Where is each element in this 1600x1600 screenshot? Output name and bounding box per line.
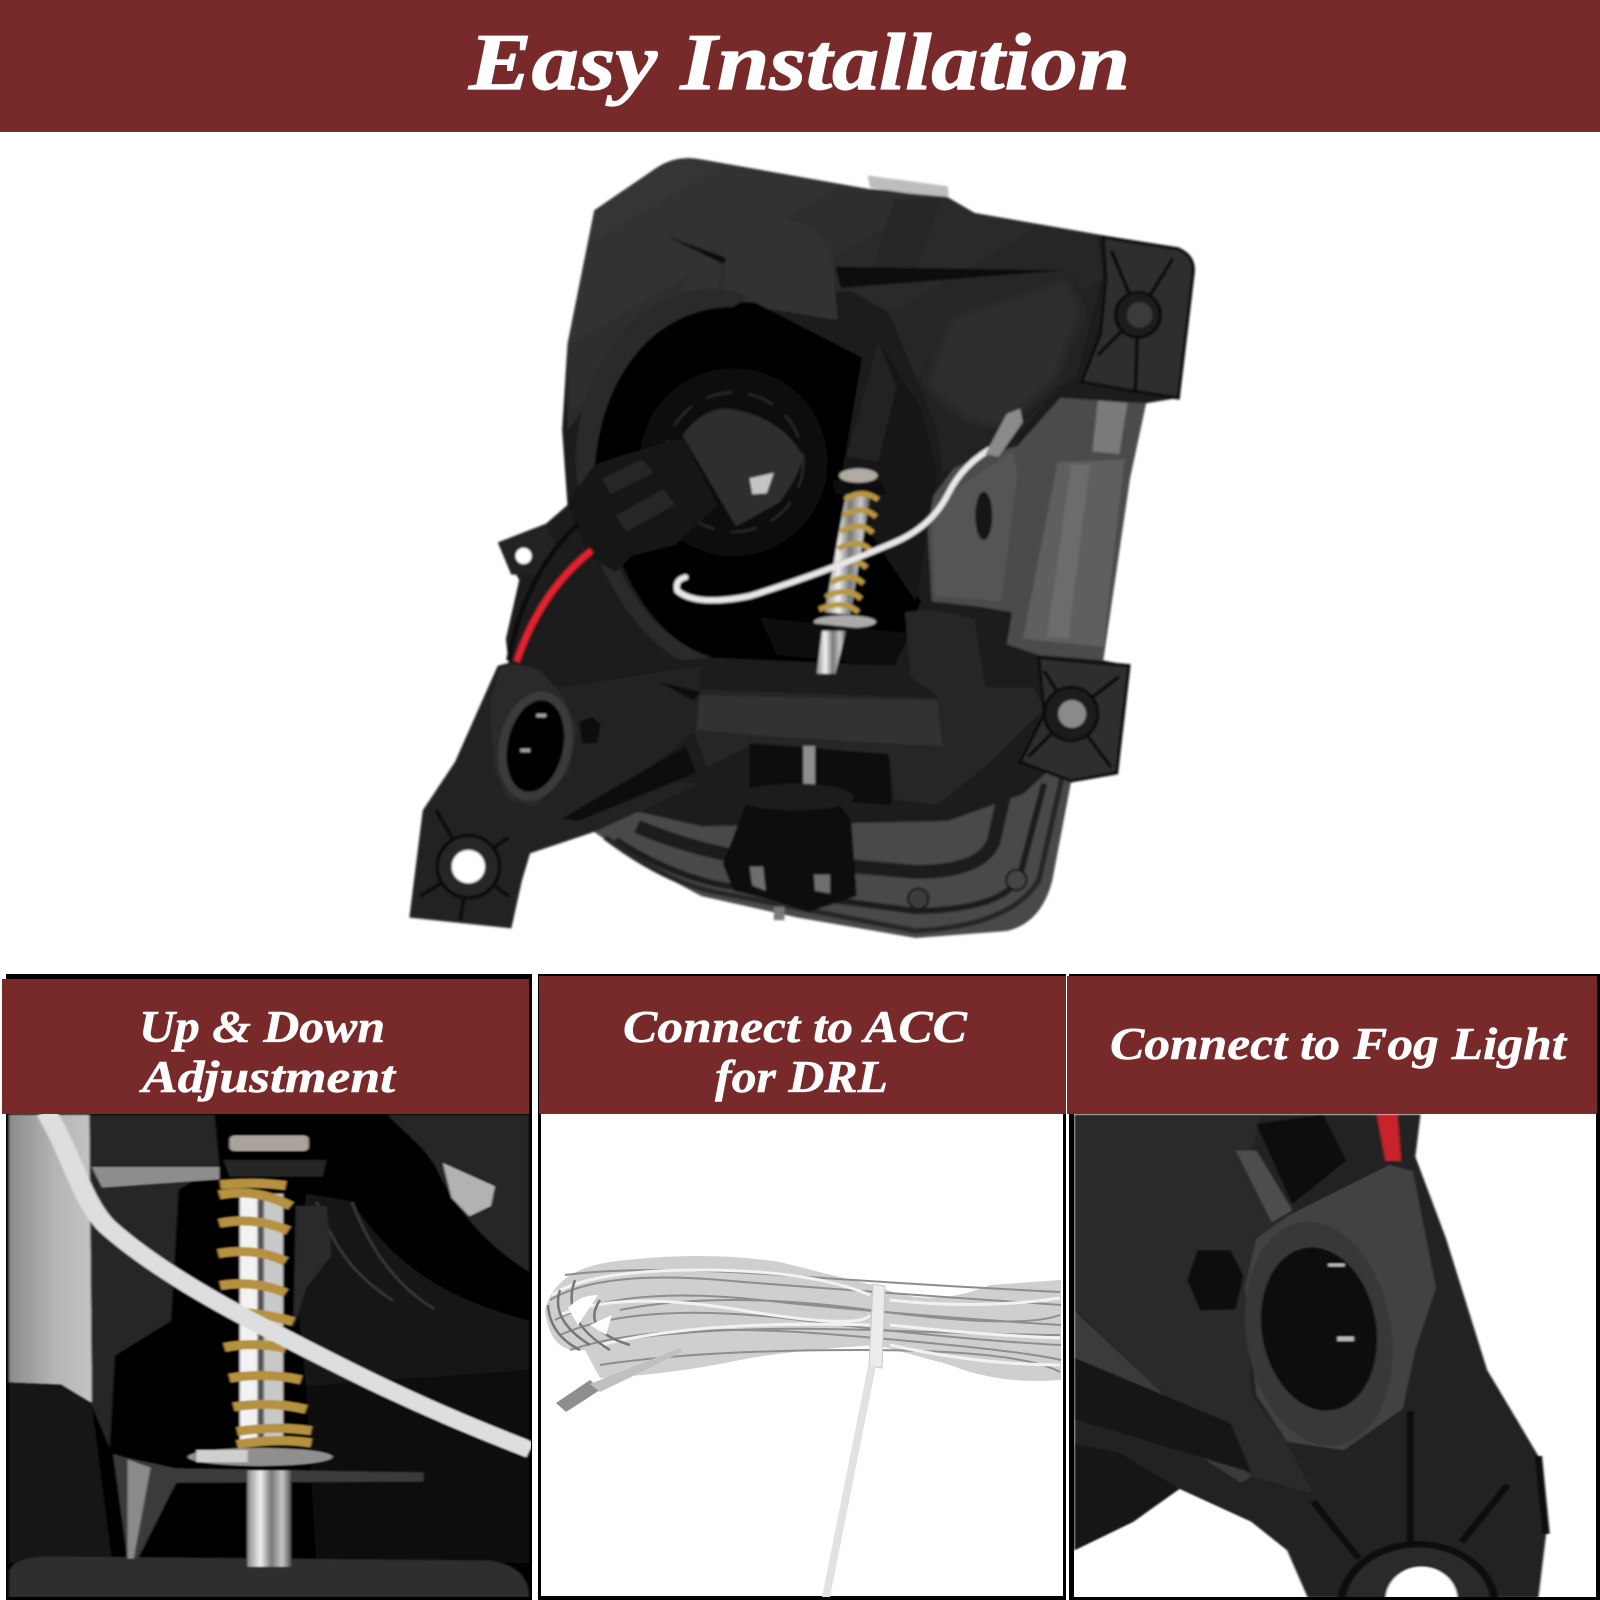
panel 1 header: Adjustment <box>139 1051 396 1102</box>
dark upper block <box>89 1115 219 1448</box>
pins <box>1328 1263 1354 1341</box>
zip tie tail <box>822 1366 876 1597</box>
lower-left struts <box>1074 1311 1251 1483</box>
retainer <box>223 1160 327 1176</box>
washer <box>188 1448 333 1466</box>
lower bracket <box>723 784 857 920</box>
white wire <box>46 1112 531 1450</box>
arm struts <box>562 682 701 821</box>
panel 1 header: Up & Down <box>139 1001 385 1052</box>
upper-left shading <box>1074 1114 1260 1472</box>
wire bundle photo <box>545 1256 1061 1597</box>
panel 1 header <box>2 979 529 1114</box>
bulb chip <box>443 1163 495 1216</box>
wire strands <box>550 1270 1061 1372</box>
body highlights <box>926 280 1082 430</box>
arc highlights <box>316 1202 434 1308</box>
red wire <box>517 551 592 661</box>
right lower arc shading <box>296 1194 529 1386</box>
panel 2 header: for DRL <box>715 1051 888 1102</box>
lamp ring left <box>1074 1444 1179 1550</box>
lower right mount <box>1020 658 1129 781</box>
rod <box>240 1194 283 1440</box>
white gaps in loops <box>568 1295 612 1335</box>
bundle end loops <box>548 1280 630 1350</box>
black wedge <box>1256 1115 1346 1204</box>
hub hole <box>1386 1567 1457 1600</box>
right upper dark area <box>388 1115 529 1272</box>
adjuster close-up photo <box>7 1112 531 1598</box>
screw head <box>230 1135 309 1151</box>
red wire <box>1377 1115 1401 1161</box>
left lower arm <box>409 666 701 928</box>
lens frame <box>594 746 1076 938</box>
title banner <box>0 0 1600 132</box>
plug inner black <box>1260 1247 1378 1411</box>
bright strands <box>552 1270 1060 1365</box>
bottom rail <box>9 1557 529 1598</box>
diagonal light panel <box>1236 1151 1292 1222</box>
upper right mount <box>1082 237 1193 398</box>
panel 2 header <box>539 976 1066 1114</box>
cavity <box>594 302 921 666</box>
strut dark <box>1074 1358 1251 1472</box>
socket ring detail <box>664 392 803 532</box>
plug body <box>1245 1165 1436 1450</box>
spring assembly <box>760 469 910 674</box>
threaded rod <box>803 746 815 789</box>
hub lines <box>1313 1411 1546 1559</box>
large adjuster box <box>693 611 1044 805</box>
bulb connector <box>567 409 803 572</box>
hub <box>1341 1544 1495 1600</box>
lower left mounting hub <box>420 810 509 920</box>
panel: connect to fog light <box>1067 974 1600 1600</box>
rear ribs <box>680 186 766 296</box>
hex recess <box>579 717 601 743</box>
left grey column <box>9 1115 92 1403</box>
dark housing left <box>9 1382 112 1563</box>
black wire <box>509 524 578 660</box>
upper body <box>567 158 1103 473</box>
rib spine <box>873 197 942 269</box>
panel: up and down adjustment <box>2 974 532 1600</box>
terminal <box>556 1380 600 1412</box>
panel 2 header: Connect to ACC <box>623 1001 968 1052</box>
hexagon recess <box>1187 1250 1244 1311</box>
panel: connect to ACC for DRL <box>538 974 1066 1600</box>
bulb socket disc <box>640 368 827 556</box>
bezel ring <box>576 289 750 660</box>
bundle mass <box>545 1256 1061 1381</box>
grey strap <box>92 1167 219 1188</box>
wire terminal <box>985 409 1023 457</box>
white wire <box>677 446 996 600</box>
right housing strip <box>926 398 1146 660</box>
electrical plug <box>488 665 582 808</box>
main product photo: lamp rear view <box>409 158 1193 938</box>
spring <box>218 1183 311 1445</box>
dome <box>723 220 838 320</box>
lower right block <box>306 1370 529 1563</box>
housing silhouette <box>1074 1115 1546 1598</box>
upper fins <box>667 236 1066 288</box>
plate <box>113 1454 423 1559</box>
top clip <box>867 176 949 197</box>
lamp silhouette <box>409 158 1193 938</box>
panel 3 header: Connect to Fog Light <box>1110 1018 1567 1069</box>
lower rod <box>247 1470 291 1567</box>
box slot <box>750 743 892 805</box>
plug rim <box>1246 1222 1392 1446</box>
mottled strip <box>293 1206 332 1329</box>
plug close-up photo <box>1074 1115 1546 1600</box>
central fin <box>843 342 937 601</box>
zip tie <box>869 1284 885 1368</box>
left tab with hole <box>498 524 557 575</box>
title banner: Easy Installation <box>468 17 1130 107</box>
panel 3 header <box>1067 976 1597 1114</box>
